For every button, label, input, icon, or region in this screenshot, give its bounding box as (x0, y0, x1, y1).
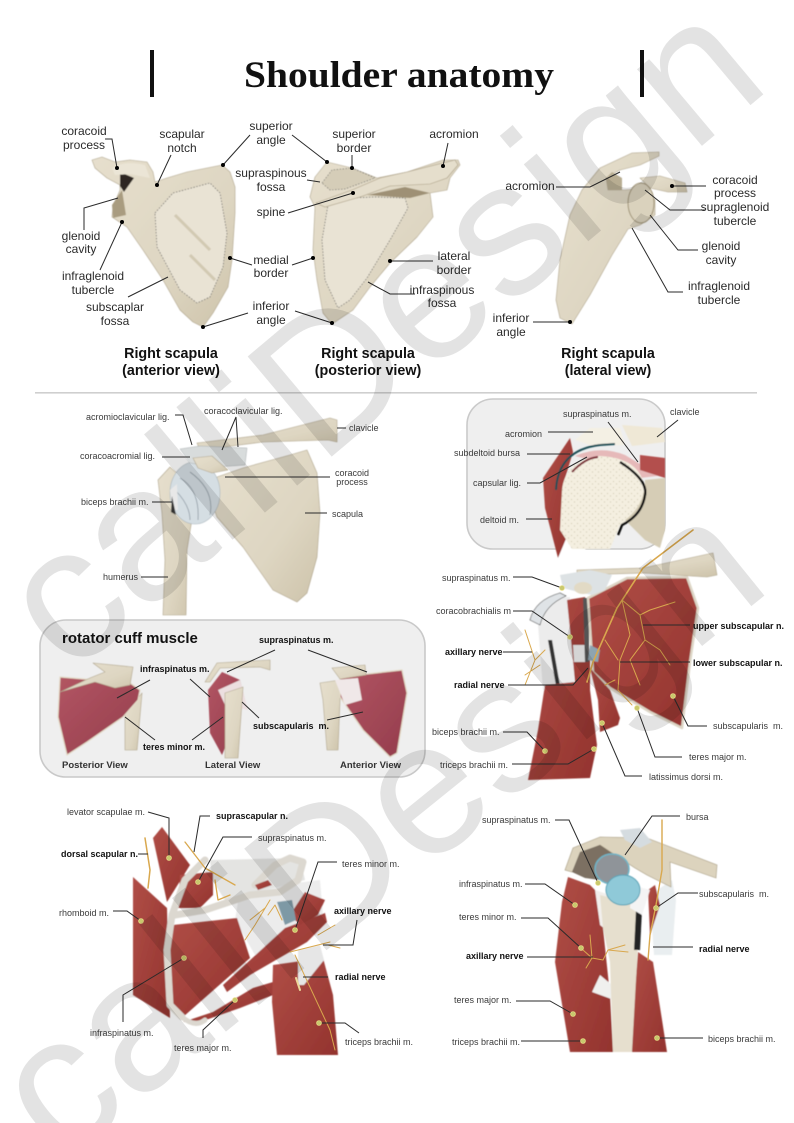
label: supraspinatus m. inset (563, 409, 638, 462)
label: subscapularis m.: subscapularis m. (713, 721, 783, 731)
label: suprascapular n. (194, 811, 288, 852)
caption: posterior view (315, 346, 421, 379)
label: infraspinatus m.: infraspinatus m. (140, 664, 210, 674)
label: subscapularis m. (242, 702, 363, 731)
label: subscaplar fossa: subscaplar (86, 300, 144, 314)
label: coracobrachialis m: coracobrachialis m (436, 606, 511, 616)
label: superior angle: angle (256, 133, 286, 147)
panel: posterior muscles and nerves (59, 807, 413, 1055)
label: radial nerve (303, 972, 386, 982)
label: infraglenoid tubercle lateral: infraglenoid (688, 279, 750, 293)
label: triceps brachii m. (440, 746, 596, 770)
label: biceps brachii m.: biceps brachii m. (432, 727, 500, 737)
label: teres minor m. (459, 912, 584, 950)
shared central labels (201, 119, 355, 329)
label: superior angle (221, 119, 329, 167)
label: axillary nerve (323, 906, 392, 945)
label: superior angle: superior (249, 119, 293, 133)
label: inferior angle (201, 299, 334, 329)
label: teres major m.: teres major m. (454, 995, 512, 1005)
label: coracoclavicular lig.: coracoclavicular lig. (204, 406, 283, 416)
label: coracoid process lateral: coracoid (712, 173, 758, 187)
label: dorsal scapular n.: dorsal scapular n. (61, 849, 138, 859)
panel: right scapula posterior view (310, 127, 479, 379)
label: acromion inset (505, 429, 593, 439)
label: radial nerve: radial nerve (699, 944, 750, 954)
title: Shoulder anatomy (244, 55, 555, 96)
caption: anterior view: Right scapula (124, 346, 219, 362)
label: radial nerve: radial nerve (335, 972, 386, 982)
label: supraspinatus m.: supraspinatus m. (258, 833, 327, 843)
label: medial border: border (254, 266, 288, 280)
label: subscapularis m.: subscapularis m. (699, 889, 769, 899)
nerves (583, 820, 662, 968)
panel background (40, 620, 425, 777)
label: lateral border: lateral (438, 249, 470, 263)
label: clavicle inset: clavicle (670, 407, 700, 417)
label: subscapularis m. (670, 694, 783, 731)
label: teres major m. (634, 706, 747, 762)
label: infraspinatus m. (117, 664, 210, 698)
illustration: anterior bones (158, 418, 337, 615)
label: triceps brachii m.: triceps brachii m. (452, 1037, 520, 1047)
bone: posterior scapula (310, 160, 460, 324)
label: infraspinatus m.: infraspinatus m. (90, 1028, 154, 1038)
inset: shoulder joint cross-section (454, 399, 700, 572)
label: coracoid process lateral: process (714, 186, 756, 200)
label: scapula (305, 509, 363, 519)
caption: lateral view (561, 346, 656, 379)
label: latissimus dorsi m.: latissimus dorsi m. (649, 772, 723, 782)
label: supraspinatus m.: supraspinatus m. (259, 635, 334, 645)
label: triceps brachii m.: triceps brachii m. (345, 1037, 413, 1047)
label: coracoid process (61, 124, 119, 170)
label: supraspinous fossa (235, 166, 320, 194)
label: biceps brachii m.: biceps brachii m. (81, 497, 149, 507)
label: rhomboid m.: rhomboid m. (59, 908, 109, 918)
caption: lateral view: Right scapula (561, 346, 656, 362)
label: acromion lateral: acromion (505, 179, 555, 193)
label: supraspinatus m.: supraspinatus m. (482, 815, 551, 825)
label: inferior angle lateral: angle (496, 325, 526, 339)
label: superior border: superior (332, 127, 376, 141)
label: coracoid process: coracoid (61, 124, 107, 138)
label: teres major m. (174, 998, 238, 1053)
label: coracoacromial lig.: coracoacromial lig. (80, 451, 155, 461)
label: inferior angle: angle (256, 313, 286, 327)
label: lateral border (388, 249, 471, 277)
panel: anterior muscles and nerves (432, 399, 784, 782)
label: spine (257, 191, 355, 219)
inset background (467, 399, 665, 549)
label: bursa: bursa (686, 812, 709, 822)
label: subdeltoid bursa (454, 448, 570, 458)
label: lateral border: border (437, 263, 471, 277)
illustration: posterior muscles (133, 827, 338, 1055)
label: infraglenoid tubercle: infraglenoid (62, 269, 124, 283)
label: supraspinatus m. (196, 833, 327, 884)
label: glenoid cavity lateral (650, 215, 740, 267)
label: capsular lig.: capsular lig. (473, 478, 521, 488)
divider (35, 392, 757, 394)
label: humerus (103, 572, 168, 582)
label: capsular lig. (473, 457, 587, 488)
label: glenoid cavity lateral: glenoid (702, 239, 740, 253)
label: supraglenoid tubercle: tubercle (714, 214, 757, 228)
label: supraspinatus m. (227, 635, 367, 672)
label: teres major m. (454, 995, 576, 1016)
label: axillary nerve (466, 951, 593, 961)
panel: right scapula anterior view (61, 124, 235, 379)
label: axillary nerve (445, 647, 532, 657)
illustration: muscles and clavicle (528, 553, 717, 780)
label: infraglenoid tubercle lateral: tubercle (698, 293, 741, 307)
label: medial border: medial (253, 253, 289, 267)
label: coracoid process: process (63, 138, 105, 152)
label: scapular notch: notch (167, 141, 197, 155)
panel: rotator cuff muscle (40, 620, 425, 777)
bone: anterior scapula (92, 157, 235, 327)
label: infraspinous fossa: fossa (428, 296, 457, 310)
label: inferior angle lateral (493, 311, 572, 339)
panel: right scapula lateral view (493, 152, 769, 379)
label: teres minor m. (292, 859, 400, 932)
label: latissimus dorsi m. (600, 720, 723, 782)
illustration: lateral view (205, 660, 270, 758)
illustration: anterior view (320, 665, 407, 757)
label: biceps brachii m. (432, 727, 548, 754)
label: scapular notch (155, 127, 205, 187)
label: supraspinous fossa: supraspinous (235, 166, 307, 180)
label: infraspinatus m. (459, 879, 578, 908)
label: infraglenoid tubercle: tubercle (72, 283, 115, 297)
label: humerus: humerus (103, 572, 139, 582)
label: teres minor m. (125, 717, 223, 752)
label: rhomboid m. (59, 908, 144, 924)
label: scapula: scapula (332, 509, 363, 519)
label: lower subscapular n.: lower subscapular n. (693, 658, 783, 668)
label: coracoid process: coracoid (335, 468, 369, 478)
label: supraglenoid tubercle: supraglenoid (701, 200, 769, 214)
caption: lateral view: Lateral View (205, 760, 261, 771)
label: acromion inset: acromion (505, 429, 542, 439)
label: glenoid cavity: cavity (66, 242, 96, 256)
nerves (525, 530, 693, 705)
nerves (145, 838, 340, 1050)
label: acromion lateral (505, 172, 620, 193)
label: coracobrachialis m (436, 606, 572, 640)
label: superior border (332, 127, 376, 170)
caption: anterior view: (anterior view) (122, 363, 220, 379)
bone: lateral scapula (556, 152, 687, 324)
label: coracoid process: process (336, 477, 368, 487)
label: acromioclavicular lig.: acromioclavicular lig. (86, 412, 170, 422)
label: coracoid process lateral (670, 173, 758, 200)
label: inferior angle lateral: inferior (493, 311, 529, 325)
label: infraspinatus m. (90, 956, 186, 1038)
label: teres major m.: teres major m. (689, 752, 747, 762)
label: levator scapulae m. (67, 807, 172, 860)
label: glenoid cavity (62, 198, 118, 256)
caption: lateral view: (lateral view) (565, 363, 652, 379)
label: axillary nerve: axillary nerve (466, 951, 524, 961)
illustration: posterior view (58, 663, 142, 755)
label: triceps brachii m.: triceps brachii m. (440, 760, 508, 770)
label: coracoid process (225, 468, 369, 487)
label: teres minor m.: teres minor m. (342, 859, 400, 869)
label: infraglenoid tubercle lateral (632, 228, 750, 307)
label: clavicle inset (657, 407, 700, 437)
label: infraspinatus m.: infraspinatus m. (459, 879, 523, 889)
caption: posterior view: Right scapula (321, 346, 416, 362)
label: supraspinatus m.: supraspinatus m. (442, 573, 511, 583)
label: radial nerve (454, 668, 588, 690)
caption: anterior view (122, 346, 220, 379)
label: spine: spine (257, 205, 286, 219)
label: acromion (429, 127, 479, 168)
caption: posterior view: (posterior view) (315, 363, 421, 379)
label: clavicle: clavicle (349, 423, 379, 433)
label: radial nerve: radial nerve (454, 680, 505, 690)
label: scapular notch: scapular (159, 127, 205, 141)
label: infraspinous fossa: infraspinous (410, 283, 474, 297)
panel: shoulder joint bones and ligaments (80, 406, 379, 615)
illustration: lateral muscles (555, 828, 717, 1052)
label: levator scapulae m.: levator scapulae m. (67, 807, 145, 817)
label: supraspinatus m. (482, 815, 600, 886)
label: medial border (228, 253, 315, 280)
label: triceps brachii m. (452, 1037, 586, 1047)
label: biceps brachii m.: biceps brachii m. (708, 1034, 776, 1044)
caption: anterior view: Anterior View (340, 760, 402, 771)
label: radial nerve (653, 944, 750, 954)
label: upper subscapular n.: upper subscapular n. (693, 621, 784, 631)
label: supraspinatus m. (442, 573, 564, 590)
label: subscaplar fossa: fossa (101, 314, 130, 328)
label: subscapularis m.: subscapularis m. (253, 721, 329, 731)
heading: rotator cuff muscle: rotator cuff muscle (62, 630, 198, 647)
label: infraglenoid tubercle (62, 220, 124, 297)
label: teres minor m.: teres minor m. (143, 742, 205, 752)
label: axillary nerve: axillary nerve (334, 906, 392, 916)
section illustration (543, 425, 665, 572)
label: deltoid m. (480, 515, 552, 525)
label: acromion: acromion (429, 127, 479, 141)
label: bursa (625, 812, 709, 855)
label: triceps brachii m. (316, 1020, 413, 1047)
label: subscaplar fossa (86, 277, 168, 328)
label: biceps brachii m. (654, 1034, 776, 1044)
label: subscapularis m. (654, 889, 769, 910)
label: glenoid cavity: glenoid (62, 229, 100, 243)
label: axillary nerve: axillary nerve (445, 647, 503, 657)
label: supraspinous fossa: fossa (257, 180, 286, 194)
label: infraspinous fossa (368, 282, 474, 310)
label: glenoid cavity lateral: cavity (706, 253, 736, 267)
label: inferior angle: inferior (253, 299, 289, 313)
label: deltoid m.: deltoid m. (480, 515, 519, 525)
label: suprascapular n.: suprascapular n. (216, 811, 288, 821)
caption: posterior view: Posterior View (62, 760, 128, 771)
label: acromioclavicular lig. (86, 412, 192, 445)
label: supraspinatus m. inset: supraspinatus m. (563, 409, 632, 419)
label: supraglenoid tubercle (645, 190, 769, 228)
label: subdeltoid bursa: subdeltoid bursa (454, 448, 520, 458)
label: coracoacromial lig. (80, 451, 190, 461)
panel: lateral muscles and nerves (452, 812, 776, 1052)
label: coracoclavicular lig. (204, 406, 283, 450)
label: teres major m.: teres major m. (174, 1043, 232, 1053)
label: teres minor m.: teres minor m. (459, 912, 517, 922)
title (150, 50, 644, 97)
label: superior border: border (337, 141, 371, 155)
